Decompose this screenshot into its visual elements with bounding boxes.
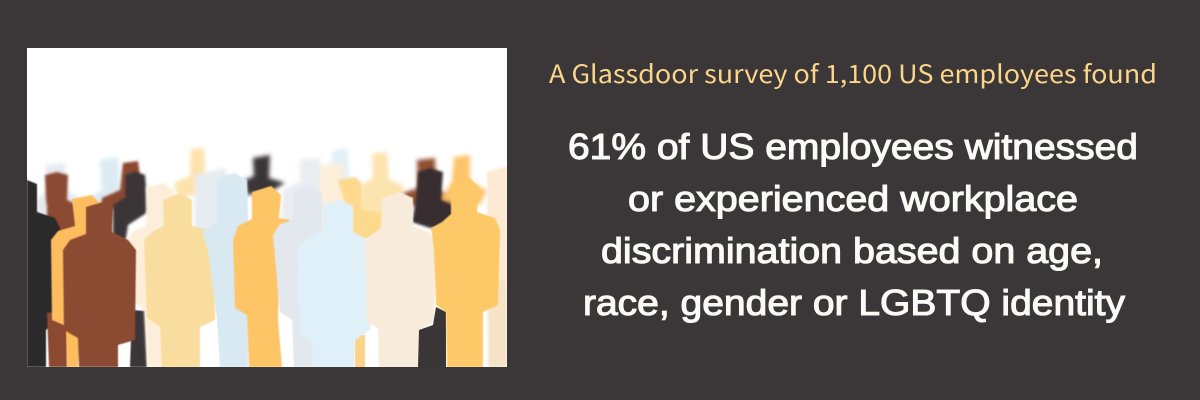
- headline statement: race, gender or LGBTQ identity: [583, 282, 1126, 323]
- headline statement: [568, 126, 1138, 323]
- headline statement: or experienced workplace: [628, 178, 1078, 219]
- headline statement: 61% of US employees witnessed: [568, 126, 1138, 167]
- cream figure: [126, 183, 175, 367]
- subtitle: A Glassdoor survey of 1,100 US employees found: [549, 55, 1157, 91]
- back row figures: [35, 148, 487, 240]
- light blue figure: [202, 173, 248, 367]
- tan figure: [144, 193, 215, 367]
- left black figure: [27, 180, 60, 367]
- grey figure: [273, 187, 325, 367]
- photo: paper cut-out figures: [27, 48, 507, 367]
- orange right front figure: [431, 178, 500, 367]
- rear black legs: [418, 307, 446, 367]
- orange figure behind brown: [50, 194, 100, 367]
- mid row figures: [45, 161, 507, 367]
- pale yellow legs: [355, 335, 365, 367]
- brown front figure: [63, 202, 136, 367]
- orange centre figure: [233, 186, 290, 367]
- pale blue front figure: [298, 200, 374, 367]
- headline statement: discrimination based on age,: [601, 230, 1103, 271]
- cream tan front figure: [365, 192, 436, 367]
- brown leg, rear black leg: [47, 310, 147, 367]
